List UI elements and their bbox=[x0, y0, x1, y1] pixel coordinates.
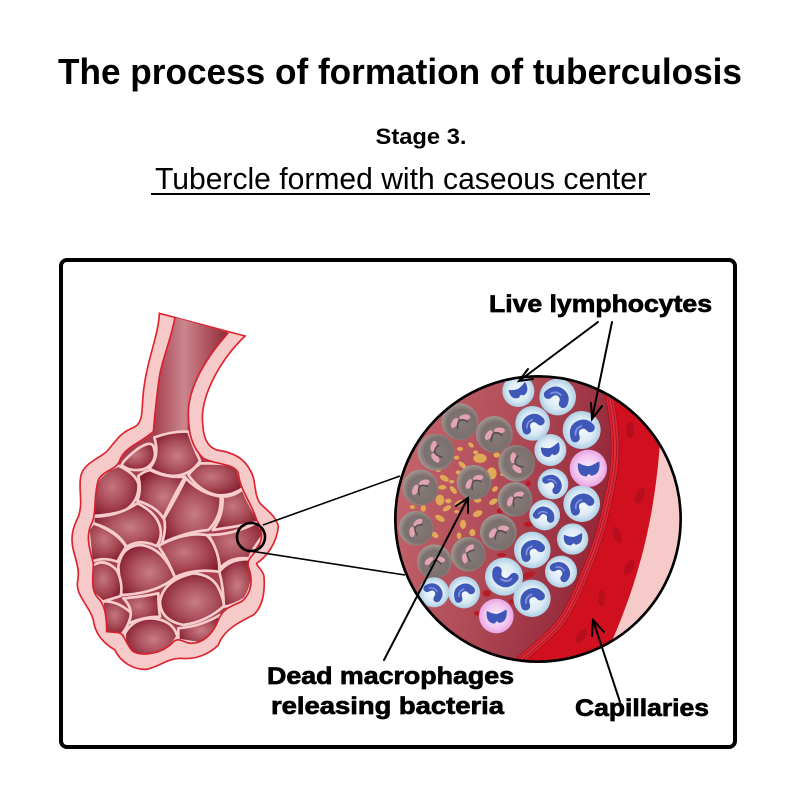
capillary blood vessel bbox=[527, 400, 660, 660]
dead macrophages bbox=[398, 403, 535, 578]
arrow: capillaries bbox=[592, 620, 620, 702]
pink lymphocytes bbox=[479, 450, 607, 633]
label: live lymphocytes: Live lymphocytes bbox=[489, 291, 712, 318]
arrows: live lymphocytes bbox=[519, 322, 612, 419]
alveolar interior bbox=[88, 317, 262, 654]
subtitle: Tubercle formed with caseous center bbox=[155, 161, 647, 196]
live lymphocytes bbox=[418, 370, 602, 619]
alveolar inner wall line bbox=[88, 317, 262, 654]
magnified tubercle bbox=[394, 370, 685, 665]
label: capillaries: Capillaries bbox=[575, 695, 709, 722]
label: dead macrophages releasing bacteria: releasing bacteria bbox=[271, 693, 505, 720]
stage heading: Stage 3. bbox=[376, 124, 466, 149]
capillary wall lines bbox=[517, 393, 615, 663]
caseous granules bbox=[410, 441, 504, 540]
red blood cells bbox=[574, 421, 647, 645]
alveolar outer wall bbox=[72, 313, 278, 669]
dark red debris bbox=[474, 481, 536, 616]
arrow: dead macrophages bbox=[384, 498, 468, 660]
label: dead macrophages releasing bacteria bbox=[267, 663, 514, 720]
magnifier circle on alveolus bbox=[237, 523, 265, 551]
lens outline bbox=[395, 376, 681, 662]
alveoli chambers bbox=[88, 432, 265, 657]
capillary pale wall bbox=[612, 447, 680, 639]
airway tube bbox=[154, 317, 228, 437]
label: dead macrophages releasing bacteria: Dead macrophages bbox=[267, 663, 514, 690]
title: The process of formation of tuberculosis bbox=[58, 51, 742, 92]
panel: diagram frame bbox=[61, 260, 735, 747]
lens base tissue bbox=[395, 376, 681, 662]
zoom leader lines bbox=[250, 476, 405, 575]
illustration: alveolar sac bbox=[72, 313, 278, 669]
